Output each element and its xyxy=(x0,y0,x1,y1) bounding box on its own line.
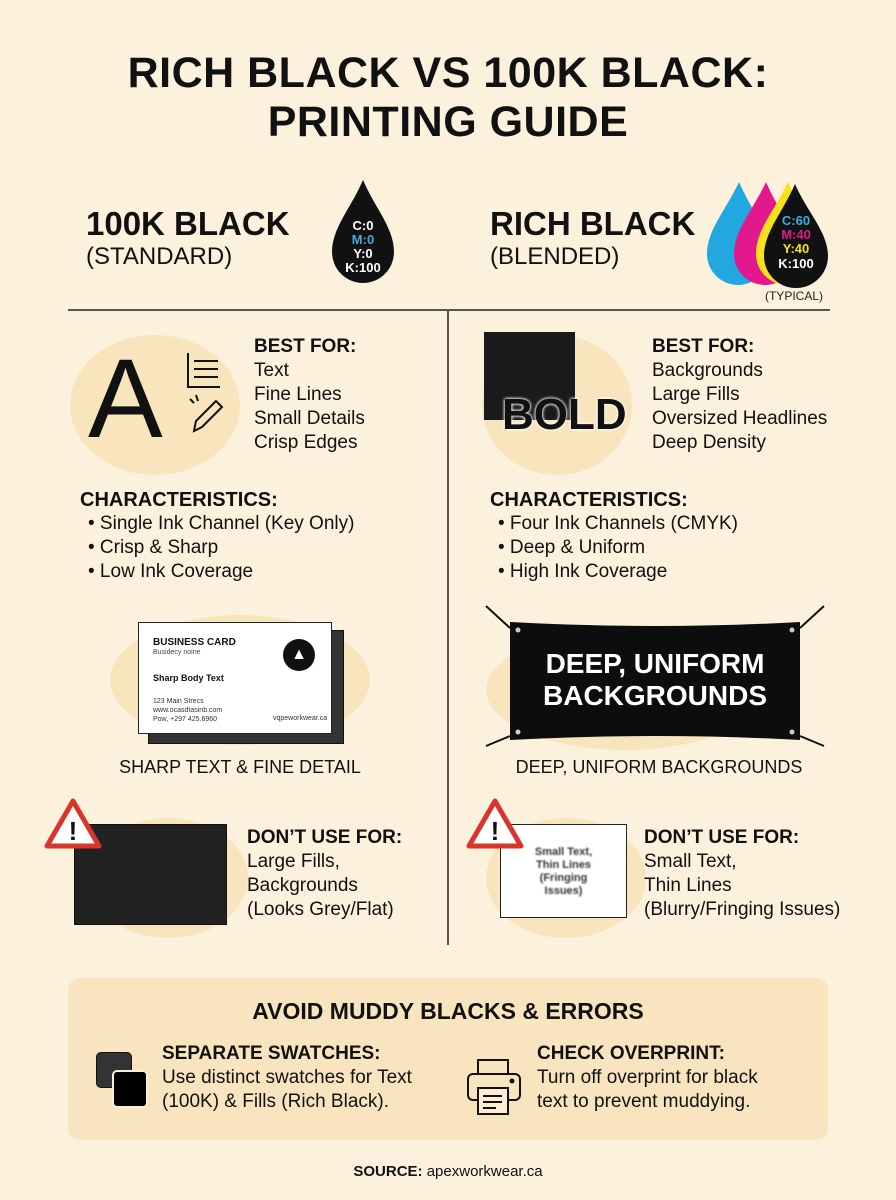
panel: 100K don't use: DON’T USE FOR: xyxy=(247,827,402,848)
panel: rich don't use: DON’T USE FOR: xyxy=(644,827,799,848)
icon: 100K drop: K:100 xyxy=(345,260,381,275)
business card illustration: www.ocasdtasinb.com xyxy=(153,707,222,714)
icon: CMYK drops: C:60 xyxy=(782,213,810,228)
icon: 100K drop: C:0 xyxy=(353,218,373,233)
panel: rich best for: Large Fills xyxy=(652,384,740,405)
icon: lines and pencil xyxy=(187,353,224,433)
icon: 100K drop: M:0 xyxy=(352,232,374,247)
characteristics right xyxy=(490,489,738,582)
heading: rich black: (BLENDED) xyxy=(490,243,619,270)
characteristics right: • Four Ink Channels (CMYK) xyxy=(498,513,738,534)
panel: rich best for: Backgrounds xyxy=(652,360,763,381)
characteristics left: • Low Ink Coverage xyxy=(88,561,253,582)
business card illustration: Sharp Body Text xyxy=(153,673,224,683)
title: RICH BLACK VS 100K BLACK: xyxy=(128,49,768,97)
banner illustration xyxy=(485,605,825,750)
panel: rich don't use: Issues) xyxy=(545,885,582,897)
icon: 100K drop: Y:0 xyxy=(353,246,373,261)
icon: printer xyxy=(467,1059,521,1115)
business card illustration xyxy=(110,615,370,745)
banner illustration: DEEP, UNIFORM xyxy=(546,648,764,679)
characteristics left xyxy=(80,489,354,582)
icon: warning xyxy=(466,798,524,848)
heading: rich black xyxy=(490,205,695,270)
caption left: SHARP TEXT & FINE DETAIL xyxy=(119,757,361,777)
panel: rich don't use: Small Text, xyxy=(644,851,737,872)
characteristics left: • Crisp & Sharp xyxy=(88,537,218,558)
panel: 100K don't use: Large Fills, xyxy=(247,851,340,872)
panel: rich best for: Oversized Headlines xyxy=(652,408,827,429)
panel: rich best for xyxy=(482,332,827,475)
characteristics right: • Deep & Uniform xyxy=(498,537,645,558)
panel: 100K best for: Text xyxy=(254,360,289,381)
heading: rich black: RICH BLACK xyxy=(490,205,695,242)
business card illustration: Pow, +297 425.6960 xyxy=(153,716,217,723)
icon: CMYK drops: M:40 xyxy=(781,227,811,242)
panel: rich don't use: Small Text, xyxy=(535,846,592,858)
panel: rich best for: BOLD xyxy=(502,390,627,439)
panel: rich best for: BEST FOR: xyxy=(652,336,754,357)
panel: rich don't use: (Fringing xyxy=(540,872,587,884)
icon: CMYK drops xyxy=(707,182,828,303)
business card illustration: vqpeworkwear.ca xyxy=(273,715,327,722)
business card illustration: Busidecy noine xyxy=(153,649,200,656)
characteristics right: • High Ink Coverage xyxy=(498,561,667,582)
panel: 100K best for xyxy=(70,335,365,475)
panel: 100K best for: BEST FOR: xyxy=(254,336,356,357)
caption right: DEEP, UNIFORM BACKGROUNDS xyxy=(516,757,802,777)
icon: warning xyxy=(44,798,102,848)
icon: warning: ! xyxy=(491,816,499,846)
panel: 100K don't use: (Looks Grey/Flat) xyxy=(247,899,394,920)
panel: 100K don't use: Backgrounds xyxy=(247,875,358,896)
icon: swatches xyxy=(96,1052,132,1088)
panel: avoid muddy blacks: (100K) & Fills (Rich Black). xyxy=(162,1091,389,1112)
business card illustration: BUSINESS CARD xyxy=(153,637,236,648)
icon: CMYK drops: K:100 xyxy=(778,256,814,271)
panel: avoid muddy blacks: AVOID MUDDY BLACKS & ERRORS xyxy=(252,998,644,1024)
panel: rich don't use: (Blurry/Fringing Issues) xyxy=(644,899,840,920)
heading: 100K black xyxy=(86,205,290,270)
banner illustration: BACKGROUNDS xyxy=(543,680,767,711)
panel: 100K best for: Fine Lines xyxy=(254,384,342,405)
characteristics right: CHARACTERISTICS: xyxy=(490,489,688,511)
panel: 100K best for: Crisp Edges xyxy=(254,432,358,453)
heading: 100K black: 100K BLACK xyxy=(86,205,290,242)
panel: avoid muddy blacks: SEPARATE SWATCHES: xyxy=(162,1043,381,1064)
business card illustration: 123 Main Strecs xyxy=(153,698,204,705)
icon: warning: ! xyxy=(69,816,77,846)
icon: 100K drop xyxy=(332,180,394,283)
panel: rich best for: Deep Density xyxy=(652,432,766,453)
panel: avoid muddy blacks: text to prevent muddying. xyxy=(537,1091,750,1112)
panel: rich don't use: Thin Lines xyxy=(644,875,732,896)
icon: black square BOLD xyxy=(484,332,575,420)
panel: rich don't use: Thin Lines xyxy=(536,859,591,871)
characteristics left: • Single Ink Channel (Key Only) xyxy=(88,513,354,534)
heading: 100K black: (STANDARD) xyxy=(86,243,232,270)
panel: avoid muddy blacks: Turn off overprint for black xyxy=(537,1067,758,1088)
icon: CMYK drops: (TYPICAL) xyxy=(765,289,823,303)
panel: avoid muddy blacks: CHECK OVERPRINT: xyxy=(537,1043,725,1064)
panel: avoid muddy blacks: Use distinct swatches for Text xyxy=(162,1067,412,1088)
icon: letter A: A xyxy=(88,336,163,461)
panel: 100K best for: Small Details xyxy=(254,408,365,429)
title: PRINTING GUIDE xyxy=(268,98,628,146)
panel: 100K don't use xyxy=(44,798,402,938)
business card illustration: ▲ xyxy=(291,646,307,663)
panel: avoid muddy blacks xyxy=(68,978,828,1140)
characteristics left: CHARACTERISTICS: xyxy=(80,489,278,511)
panel: rich don't use xyxy=(466,798,840,938)
source: SOURCE: apexworkwear.ca xyxy=(353,1163,543,1180)
icon: CMYK drops: Y:40 xyxy=(783,241,809,256)
title xyxy=(128,49,768,146)
